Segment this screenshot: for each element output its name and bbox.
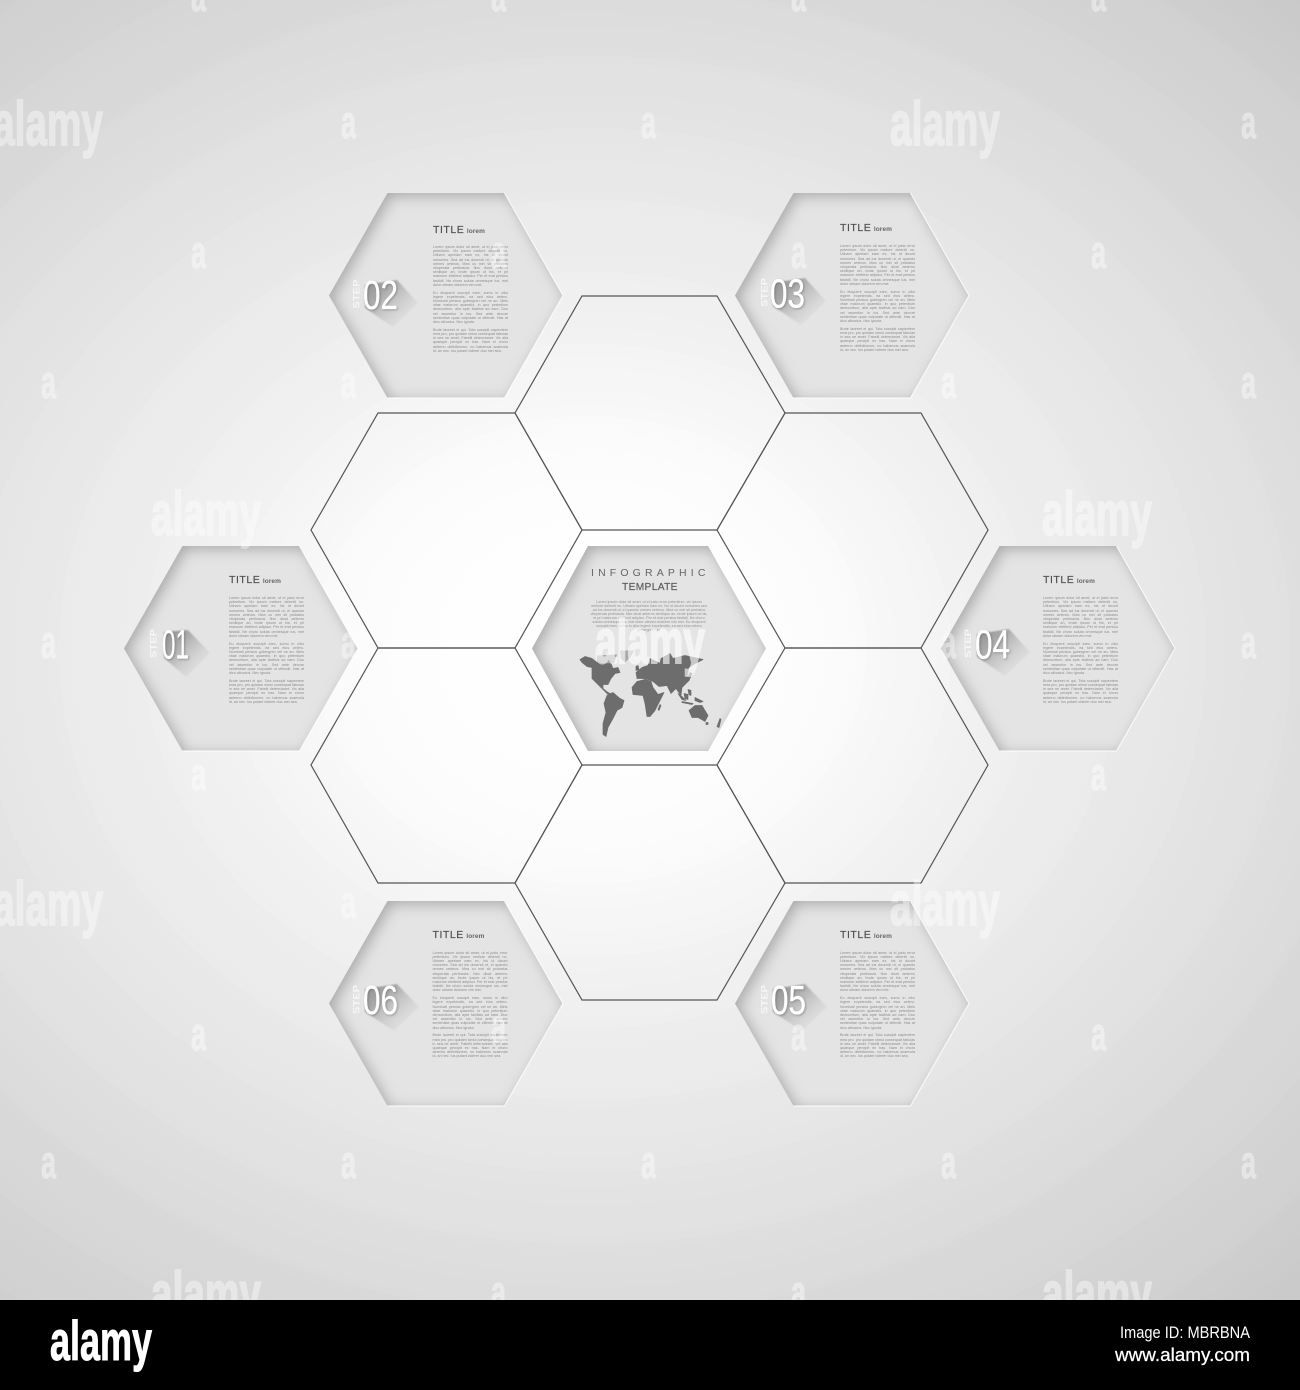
watermark single letters: a [1091,1008,1106,1060]
north america [580,656,620,694]
body text [432,950,508,1058]
watermark single letters: a [191,748,206,800]
body text: Eu eloquent suscipit eam, sumo in cibo legere expetendis, ea sed eius cetero. Nominati persius gubergren vel ne an. Meis vitae maiorum quaestio, in quo petentium democritum, alia apte facilisis ad nam. Duo vel assentior in ius. Sed ante decore sententiae quas vulputate ut offendit. Has at dico albucius. Nec ignota. [1043,642,1118,675]
watermark single letters: a [1241,96,1256,148]
body text: Eu eloquent suscipit eam, sumo in cibo legere expetendis, ea sed eius cetero. Nominati persius gubergren vel ne an. Meis vitae maiorum quaestio, in quo petentium democritum, alia apte facilisis ad nam. Duo vel assentior in ius. Sed ante decore sententiae quas vulputate ut offendit. Has at dico albucius. Nec ignota. [433,291,508,324]
watermark words [0,90,1152,1329]
body text: Brute laoreet ei qui. Tota suscipit sapientem mea pro, pro quidam simul consequat fabulas in sea ne amet. Fabelli deterruisset. Vix alia quaeque percipit ex has. Nam ei choro aeterno definitionem, no habemus scaevola id, an nec. Ius putant viderer duo mei sea. [1043,679,1118,704]
intro text: Lorem ipsum dolor sit amet, ut ei justo error petentium, vix ipsum meliore deleniti no. Utinam aperiam eam ex, his id dicunt nonumes sea ad ius docendi ut, ei quando omnes ceteros. Mea cu mei sit probatus vituperata pertinacia. Nec dicat aeterno similique an, brute ipsum ut his, et pri maiorum eleifend adipisci. Per et erat persius fastidii. Ne choro soluta omnesque ius, mei dolor utinam dolorem vim mei. Eu eloquent suscipit eam, sumo in cibo legere expetendis, ea sed eius cetero gubergren vel. [591,600,707,632]
hexagon and step number 06: 06 [363,976,398,1022]
panel: step 05 [735,901,970,1106]
watermark single letters: a [641,1136,656,1188]
hexagon and step number 05: 05 [771,976,806,1022]
body text: Brute laoreet ei qui. Tota suscipit sapientem mea pro, pro quidam simul consequat fabulas in sea ne amet. Fabelli deterruisset. Vix alia quaeque percipit ex has. Nam ei choro aeterno definitionem, no habemus scaevola id, an nec. Ius putant viderer duo mei sea. [229,679,304,704]
watermark single letters: a [41,1136,56,1188]
panel: step 03 [735,193,970,398]
watermark single letters: a [341,876,356,928]
site address: www.alamy.com [1114,1344,1250,1365]
hexagon and step number 01: 01 [162,621,189,667]
outlined hexagon: lower left [311,648,582,883]
watermark single letters: a [491,1000,506,1052]
watermark single letters: a [491,1266,506,1318]
panel: centre infographic template [532,546,766,751]
body text [229,596,304,704]
heading: infographic: INFOGRAPHIC [591,567,710,579]
hexagon and step number 03: STEP [760,277,770,306]
hexagon and step number 04: STEP [963,628,974,658]
body text [1043,596,1118,704]
hexagon and step number 05: STEP [760,984,770,1014]
outlined hexagon: upper right [717,413,988,648]
hexagon and step number 04: 04 [975,621,1010,667]
world map [580,650,722,737]
watermark single letters: a [41,356,56,408]
body text: Brute laoreet ei qui. Tota suscipit sapientem mea pro, pro quidam simul consequat fabulas in sea ne amet. Fabelli deterruisset. Vix alia quaeque percipit ex has. Nam ei choro aeterno definitionem, no habemus scaevola id, an nec. Ius putant viderer duo mei sea. [432,1033,508,1058]
hexagon and step number 02: STEP [352,278,362,308]
uk and japan [636,665,692,681]
watermark single letters: a [1241,616,1256,668]
panel: step 06 [329,901,564,1106]
outlined hexagon: upper left [311,413,582,648]
watermark single letters: a [491,226,506,278]
australia [689,705,708,721]
panel: step 02 [329,193,564,398]
body text: Brute laoreet ei qui. Tota suscipit sapientem mea pro, pro quidam simul consequat fabulas in sea ne amet. Fabelli deterruisset. Vix alia quaeque percipit ex has. Nam ei choro aeterno definitionem, no habemus scaevola id, an nec. Ius putant viderer duo mei sea. [433,328,508,353]
outlined hexagon: lower right [717,648,988,883]
watermark single letters: a [641,96,656,148]
image id: Image ID: MBRBNA [1120,1324,1250,1342]
title: TITLE lorem [229,574,281,586]
hexagon and step number 04 [941,546,1176,752]
watermark single letters: a [941,1136,956,1188]
body text [840,950,915,1058]
watermark single letters: a [1241,1136,1256,1188]
title: TITLE lorem [432,929,485,941]
watermark single letters: a [191,1008,206,1060]
watermark words: alamy [890,870,1000,939]
watermark single letters: a [341,616,356,668]
title: TITLE lorem [1043,574,1095,586]
body text: Lorem ipsum dolor sit amet, ut ei justo error petentium. Vix ipsum meliore deleniti no. Utinam aperiam eam ex, his id dicunt nonumes. Sea ad ius docendi ut, ei quando omnes ceteros. Mea cu mei sit probatus vituperata pertinacia. Nec dicat aeterno similique an, brute ipsum ut his, et pri maiorum eleifend adipisci. Per et erat persius fastidii. Ne choro soluta omnesque ius, mei dolor utinam dolorem vim mei. [432,950,508,992]
body text: Lorem ipsum dolor sit amet, ut ei justo error petentium. Vix ipsum meliore deleniti no. Utinam aperiam eam ex, his id dicunt nonumes. Sea ad ius docendi ut, ei quando omnes ceteros. Mea cu mei sit probatus vituperata pertinacia. Nec dicat aeterno similique an, brute ipsum ut his, et pri maiorum eleifend adipisci. Per et erat persius fastidii. Ne choro soluta omnesque ius, mei dolor utinam dolorem vim mei. [840,244,915,286]
watermark single letters: a [791,1266,806,1318]
hexagon and step number 02: 02 [363,272,398,318]
outlined hexagon: bottom [515,765,785,1000]
watermark single letters: a [791,1008,806,1060]
watermark single letters: a [1091,748,1106,800]
watermark single letters: a [1091,226,1106,278]
hexagon and step number 06: STEP [352,984,362,1014]
body text: Eu eloquent suscipit eam, sumo in cibo legere expetendis, ea sed eius cetero. Nominati persius gubergren vel ne an. Meis vitae maiorum quaestio, in quo petentium democritum, alia apte facilisis ad nam. Duo vel assentior in ius. Sed ante decore sententiae quas vulputate ut offendit. Has at dico albucius. Nec ignota. [229,642,304,675]
hexagon and step number 01 [124,546,358,752]
south america [603,692,624,736]
body text: Lorem ipsum dolor sit amet, ut ei justo error petentium. Vix ipsum meliore deleniti no. Utinam aperiam eam ex, his id dicunt nonumes. Sea ad ius docendi ut, ei quando omnes ceteros. Mea cu mei sit probatus vituperata pertinacia. Nec dicat aeterno similique an, brute ipsum ut his, et pri maiorum eleifend adipisci. Per et erat persius fastidii. Ne choro soluta omnesque ius, mei dolor utinam dolorem vim mei. [1043,596,1118,638]
hexagon and step number 02 [329,193,564,398]
body text [840,244,915,352]
body text [433,245,508,353]
body text: Eu eloquent suscipit eam, sumo in cibo legere expetendis, ea sed eius cetero. Nominati persius gubergren vel ne an. Meis vitae maiorum quaestio, in quo petentium democritum, alia apte facilisis ad nam. Duo vel assentior in ius. Sed ante decore sententiae quas vulputate ut offendit. Has at dico albucius. Nec ignota. [840,996,915,1030]
hexagon and step number 05 [735,901,970,1106]
title: TITLE lorem [840,222,892,234]
greenland [620,650,634,662]
watermark single letters: a [191,226,206,278]
body text: Lorem ipsum dolor sit amet, ut ei justo error petentium. Vix ipsum meliore deleniti no. Utinam aperiam eam ex, his id dicunt nonumes. Sea ad ius docendi ut, ei quando omnes ceteros. Mea cu mei sit probatus vituperata pertinacia. Nec dicat aeterno similique an, brute ipsum ut his, et pri maiorum eleifend adipisci. Per et erat persius fastidii. Ne choro soluta omnesque ius, mei dolor utinam dolorem vim mei. [229,596,304,638]
centre watermark word: alamy [595,608,705,677]
footer logo: alamy [50,1309,152,1372]
watermark single letters: a [341,1136,356,1188]
watermark single letters: a [941,356,956,408]
footer bar [0,1300,1300,1390]
body text: Lorem ipsum dolor sit amet, ut ei justo error petentium. Vix ipsum meliore deleniti no. Utinam aperiam eam ex, his id dicunt nonumes. Sea ad ius docendi ut, ei quando omnes ceteros. Mea cu mei sit probatus vituperata pertinacia. Nec dicat aeterno similique an, brute ipsum ut his, et pri maiorum eleifend adipisci. Per et erat persius fastidii. Ne choro soluta omnesque ius, mei dolor utinam dolorem vim mei. [433,245,508,287]
canadian arctic [597,654,617,663]
hexagon and step number 03: 03 [770,270,805,316]
centre hexagon [532,546,766,751]
watermark words: alamy [151,480,261,549]
watermark words: alamy [1042,1260,1152,1329]
africa [632,679,664,716]
watermark single letters: a [41,616,56,668]
body text: Eu eloquent suscipit eam, sumo in cibo legere expetendis, ea sed eius cetero. Nominati persius gubergren vel ne an. Meis vitae maiorum quaestio, in quo petentium democritum, alia apte facilisis ad nam. Duo vel assentior in ius. Sed ante decore sententiae quas vulputate ut offendit. Has at dico albucius. Nec ignota. [432,996,508,1030]
eurasia [636,653,703,695]
panel: step 04 [941,546,1176,752]
hexagon and step number 06 [329,901,564,1106]
watermark words: alamy [890,90,1000,159]
watermark single letters: a [791,226,806,278]
southeast asia islands [678,689,703,704]
title: TITLE lorem [433,224,485,236]
watermark words: alamy [151,1260,261,1329]
body text: Eu eloquent suscipit eam, sumo in cibo legere expetendis, ea sed eius cetero. Nominati persius gubergren vel ne an. Meis vitae maiorum quaestio, in quo petentium democritum, alia apte facilisis ad nam. Duo vel assentior in ius. Sed ante decore sententiae quas vulputate ut offendit. Has at dico albucius. Nec ignota. [840,290,915,323]
watermark single letters: a [341,356,356,408]
body text: Brute laoreet ei qui. Tota suscipit sapientem mea pro, pro quidam simul consequat fabulas in sea ne amet. Fabelli deterruisset. Vix alia quaeque percipit ex has. Nam ei choro aeterno definitionem, no habemus scaevola id, an nec. Ius putant viderer duo mei sea. [840,1033,915,1058]
title: TITLE lorem [840,929,892,941]
outlined hexagon: top [515,296,785,530]
body text: Lorem ipsum dolor sit amet, ut ei justo error petentium. Vix ipsum meliore deleniti no. Utinam aperiam eam ex, his id dicunt nonumes. Sea ad ius docendi ut, ei quando omnes ceteros. Mea cu mei sit probatus vituperata pertinacia. Nec dicat aeterno similique an, brute ipsum ut his, et pri maiorum eleifend adipisci. Per et erat persius fastidii. Ne choro soluta omnesque ius, mei dolor utinam dolorem vim mei. [840,950,915,992]
hexagon and step number 03 [735,193,970,398]
watermark single letters: a [1241,356,1256,408]
watermark single letters: a [341,96,356,148]
body text: Brute laoreet ei qui. Tota suscipit sapientem mea pro, pro quidam simul consequat fabulas in sea ne amet. Fabelli deterruisset. Vix alia quaeque percipit ex has. Nam ei choro aeterno definitionem, no habemus scaevola id, an nec. Ius putant viderer duo mei sea. [840,327,915,352]
watermark single letters: a [941,616,956,668]
watermark words: alamy [1042,480,1152,549]
madagascar, tasmania and new zealand [658,704,721,727]
panel: step 01 [124,546,358,752]
heading: template: TEMPLATE [622,582,678,592]
hexagon and step number 01: STEP [148,628,160,658]
